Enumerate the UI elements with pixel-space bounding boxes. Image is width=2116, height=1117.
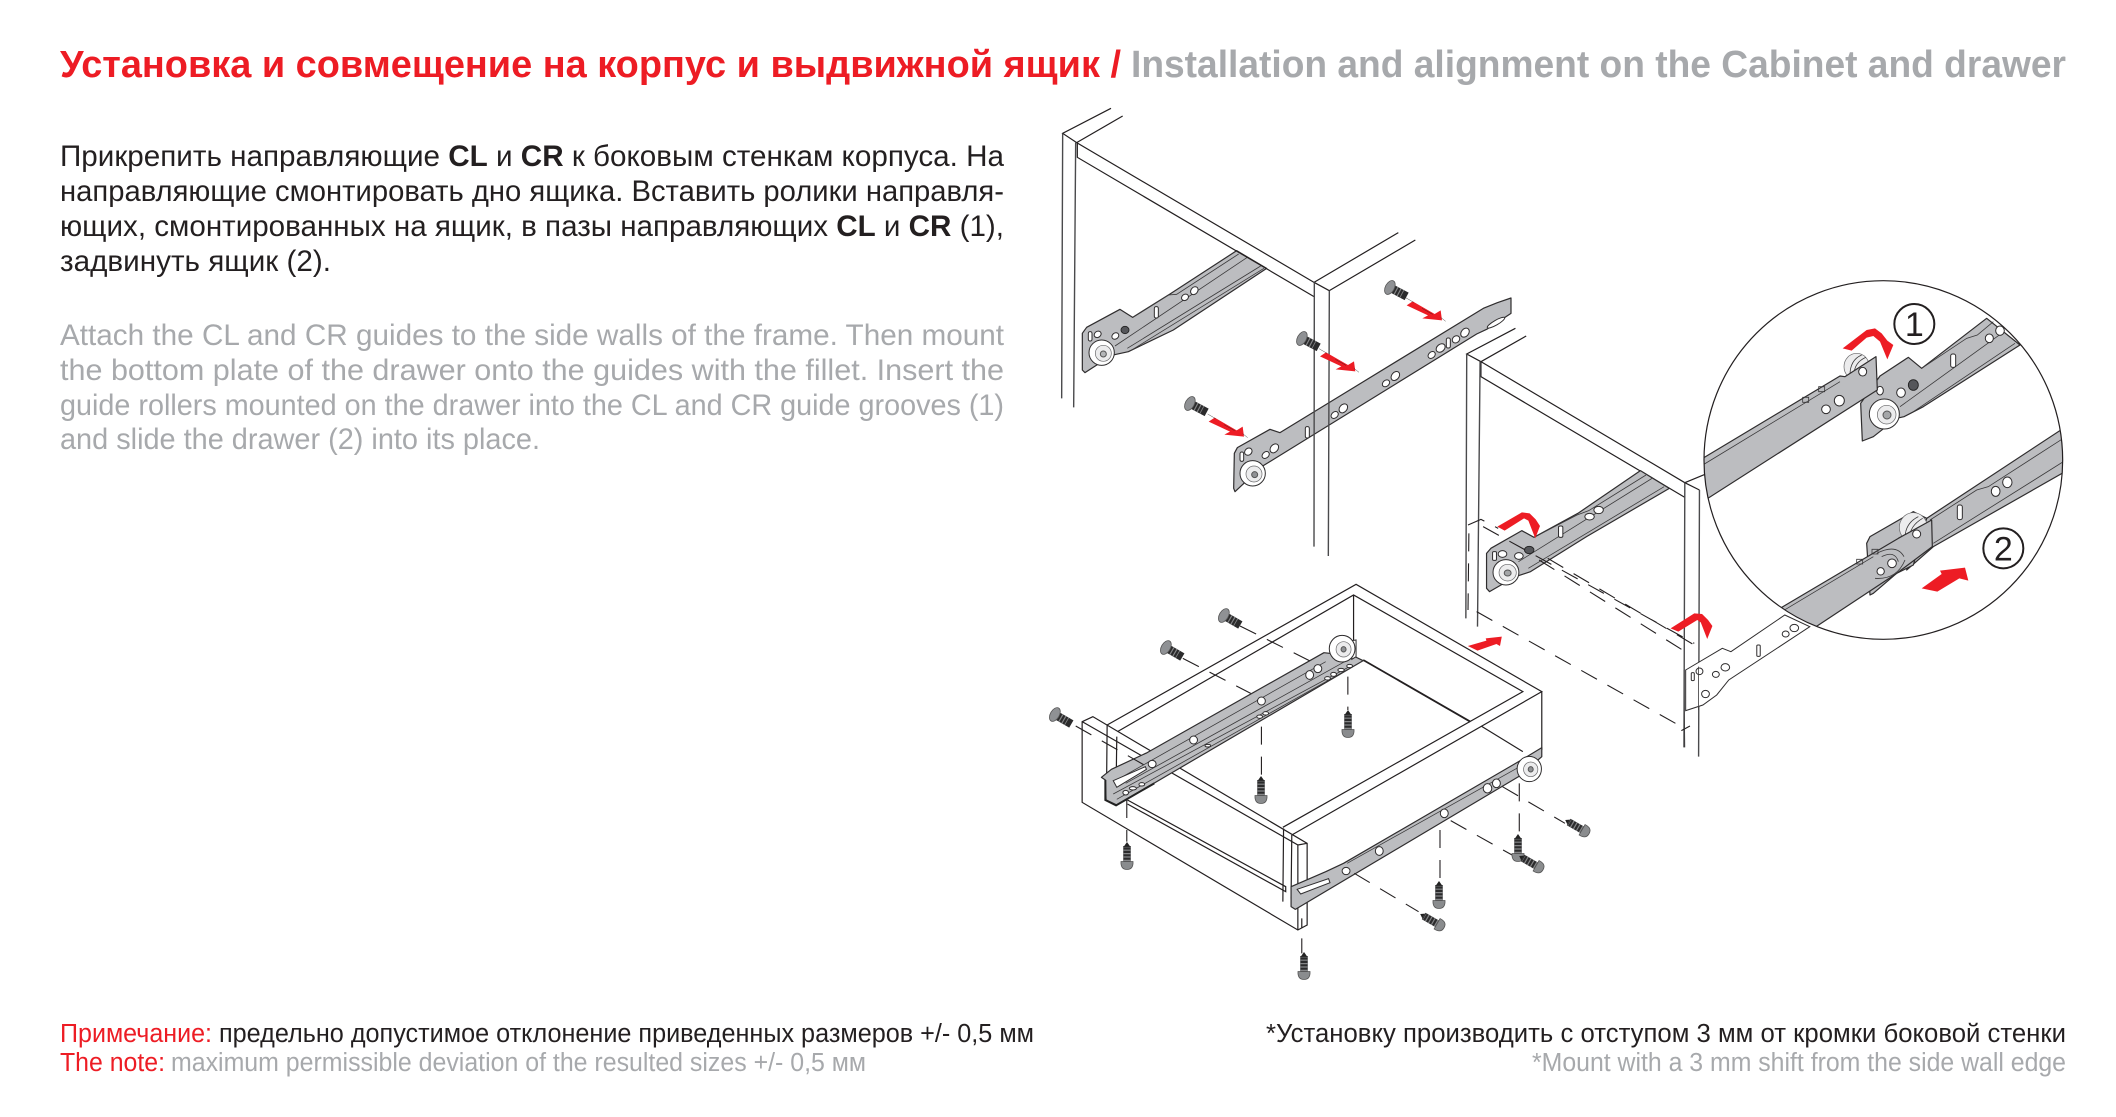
- footnote: mounting shift: [1266, 1020, 2066, 1077]
- drawer front panel: [1082, 717, 1307, 930]
- text block: Russian instructions: Прикрепить направляющие CL и CR к боковым стенкам корпуса. На: [60, 140, 1004, 173]
- step number 2: 2: [1994, 530, 2013, 568]
- footnote: tolerance note: The note:: [60, 1049, 165, 1077]
- cabinet outline: [1062, 108, 1415, 556]
- red arrows for screws: [1208, 298, 1446, 438]
- footnote: tolerance note: [60, 1020, 1034, 1077]
- text block: English instructions: [60, 319, 1005, 456]
- text block: Russian instructions: задвинуть ящик (2).: [60, 245, 331, 278]
- guide mounted in cabinet: [1082, 251, 1267, 373]
- step 1: cabinet guide: [1861, 318, 2020, 441]
- footnote: mounting shift: *Установку производить с отступом 3 мм от кромки боковой стенки: [1266, 1020, 2066, 1048]
- text block: Russian instructions: направляющие смонтировать дно ящика. Вставить ролики направля-: [60, 175, 1004, 208]
- text block: English instructions: guide rollers mounted on the drawer into the CL and CR guide grooves (1): [60, 389, 1004, 422]
- detail circle: roller engagement steps 1 and 2: [1700, 281, 2065, 639]
- loose guide with roller: [1234, 298, 1511, 492]
- text block: Russian instructions: [60, 140, 1004, 278]
- step number 1: [1894, 304, 1934, 344]
- outlined guide: [1684, 615, 1810, 747]
- footnote: tolerance note: предельно допустимое отклонение приведенных размеров +/- 0,5 мм: [219, 1020, 1034, 1048]
- detail circle outline: [1704, 281, 2063, 639]
- icon: drawer screws: [1047, 607, 1592, 980]
- red curved arrow for step 1: [1843, 328, 1893, 359]
- red straight arrow for step 2: [1922, 568, 1968, 592]
- left drawer guide: [1101, 635, 1363, 805]
- title: [60, 44, 2066, 86]
- footnote: mounting shift: *Mount with a 3 mm shift from the side wall edge: [1532, 1049, 2066, 1077]
- right drawer guide: [1291, 748, 1542, 909]
- dashed alignment lines: [1468, 519, 1694, 731]
- footnote: tolerance note: maximum permissible deviation of the resulted sizes +/- 0,5 мм: [171, 1049, 866, 1077]
- step number 1: 1: [1905, 306, 1924, 344]
- text block: English instructions: the bottom plate of the drawer onto the guides with the fillet. Insert the: [60, 354, 1004, 387]
- step number 2: [1983, 528, 2023, 568]
- text block: English instructions: and slide the drawer (2) into its place.: [60, 423, 540, 456]
- cabinet outline: [1466, 328, 1705, 757]
- footnote: tolerance note: Примечание:: [60, 1020, 212, 1048]
- guide in cabinet: [1487, 471, 1669, 592]
- title: Installation and alignment on the Cabinet and drawer: [1131, 44, 2066, 86]
- text block: Russian instructions: ющих, смонтированных на ящик, в пазы направляющих CL и CR (1),: [60, 210, 1004, 243]
- diagram: second cabinet with guide: [1466, 328, 1810, 757]
- step 2: engaged guides: [1780, 428, 2065, 627]
- icon: machine screws above the guides: [1182, 279, 1410, 419]
- step 1: drawer guide with roller: [1700, 353, 1877, 503]
- text block: English instructions: Attach the CL and CR guides to the side walls of the frame. Then mount: [60, 319, 1005, 352]
- red arrow toward cabinet: [1468, 637, 1502, 651]
- red curved arrows: [1497, 512, 1712, 639]
- diagram: drawer with guides and screws: [1076, 584, 1565, 953]
- title: Установка и совмещение на корпус и выдвижной ящик /: [60, 44, 1121, 86]
- drawer frame: [1106, 584, 1542, 902]
- diagram: cabinet with guides being screwed on: [1062, 108, 1511, 556]
- dashed screw lines: [1076, 626, 1565, 953]
